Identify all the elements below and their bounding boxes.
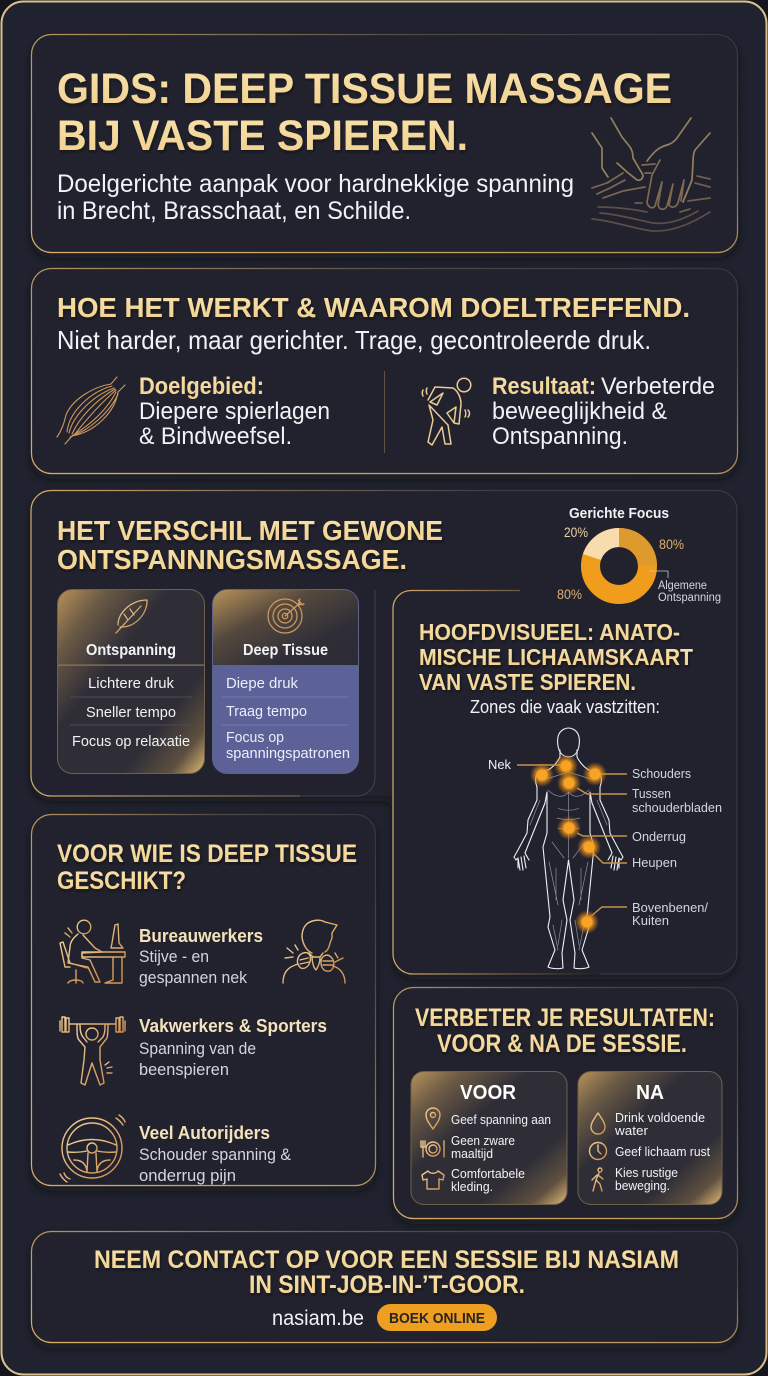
resultaat text: beweeglijkheid &	[492, 398, 667, 425]
button: boek online: BOEK ONLINE	[389, 1311, 485, 1327]
panel: contact	[32, 1232, 738, 1342]
zone labels: Schouders	[632, 766, 691, 781]
bureauwerkers text	[139, 926, 263, 987]
card: ontspanning	[58, 590, 204, 774]
autorijders text: Schouder spanning &	[139, 1145, 292, 1164]
icon: neck pain	[283, 920, 345, 983]
card: na: Drink voldoende	[615, 1111, 705, 1125]
chart: focus donut: 20%	[564, 525, 588, 540]
icon: clock	[590, 1142, 606, 1160]
heading: HOOFDVISUEEL: ANATO-	[419, 619, 680, 645]
icon: target	[268, 599, 304, 633]
heading	[57, 840, 357, 895]
icon: person with back pain	[422, 378, 471, 445]
call to action heading: IN SINT-JOB-IN-’T-GOOR.	[249, 1271, 525, 1299]
icon: walking person	[592, 1168, 603, 1191]
chart: focus donut	[557, 506, 721, 604]
callout lines	[517, 765, 627, 917]
heading: VOOR & NA DE SESSIE.	[437, 1030, 687, 1058]
heading: HET VERSCHIL MET GEWONE	[57, 515, 443, 546]
zone labels: Heupen	[632, 855, 677, 870]
panel: comparison	[57, 515, 443, 774]
card: voor: maaltijd	[451, 1147, 493, 1161]
subtitle	[57, 170, 574, 225]
doelgebied text	[139, 373, 330, 450]
call to action heading: NEEM CONTACT OP VOOR EEN SESSIE BIJ NASIAM	[94, 1246, 679, 1274]
icon: steering wheel	[60, 1115, 125, 1182]
zone labels	[488, 757, 722, 928]
doelgebied text: Diepere spierlagen	[139, 398, 330, 425]
heading	[415, 1004, 715, 1058]
heading: HOE HET WERKT & WAAROM DOELTREFFEND.	[57, 292, 690, 323]
card: voor: kleding.	[451, 1180, 493, 1194]
heading	[419, 619, 693, 695]
zone labels: Nek	[488, 757, 511, 772]
subtitle: in Brecht, Brasschaat, en Schilde.	[57, 197, 411, 225]
heading: VOOR WIE IS DEEP TISSUE	[57, 840, 357, 868]
resultaat text: Resultaat:	[492, 373, 596, 400]
title: BIJ VASTE SPIEREN.	[57, 112, 468, 160]
heading: ONTSPANNNGSMASSAGE.	[57, 544, 407, 575]
card: deep tissue: Traag tempo	[226, 703, 307, 720]
icon: location pin	[426, 1108, 440, 1129]
card: na: Geef lichaam rust	[615, 1145, 710, 1159]
vakwerkers text: beenspieren	[139, 1060, 229, 1079]
intro text: Niet harder, maar gerichter. Trage, gecontroleerde druk.	[57, 325, 651, 355]
heading	[57, 515, 443, 575]
doelgebied text: & Bindweefsel.	[139, 423, 292, 450]
autorijders text: onderrug pijn	[139, 1166, 236, 1185]
card: ontspanning: Sneller tempo	[86, 704, 176, 721]
card: ontspanning: Focus op relaxatie	[72, 733, 190, 750]
panel: title	[32, 34, 738, 252]
card: voor: Comfortabele	[451, 1167, 525, 1181]
heading: MISCHE LICHAAMSKAART	[419, 644, 693, 670]
heading: GESCHIKT?	[57, 867, 186, 895]
card: deep tissue: Deep Tissue	[243, 642, 328, 659]
icon: t-shirt	[422, 1171, 444, 1189]
card: voor: VOOR	[460, 1082, 517, 1104]
heading: VERBETER JE RESULTATEN:	[415, 1004, 715, 1032]
vakwerkers text: Vakwerkers & Sporters	[139, 1016, 327, 1036]
heading: VAN VASTE SPIEREN.	[419, 669, 636, 695]
bureauwerkers text: Stijve - en	[139, 947, 209, 966]
bureauwerkers text: Bureauwerkers	[139, 926, 263, 946]
autorijders text: Veel Autorijders	[139, 1123, 270, 1143]
card: ontspanning: Ontspanning	[86, 642, 176, 659]
panel: difference and body map background	[31, 490, 737, 974]
icon: water drop	[591, 1113, 605, 1134]
card: na: beweging.	[615, 1179, 670, 1193]
tension points	[530, 754, 607, 934]
autorijders text	[139, 1123, 292, 1185]
doelgebied text: Doelgebied:	[139, 373, 264, 400]
icon: massaging hands	[592, 118, 710, 231]
vakwerkers text	[139, 1016, 327, 1079]
chart: focus donut: Ontspanning	[658, 592, 721, 604]
card: na	[578, 1072, 722, 1204]
zone labels: Kuiten	[632, 913, 669, 928]
title	[57, 65, 672, 160]
icon: desk worker	[60, 920, 125, 983]
resultaat text: Ontspanning.	[492, 423, 628, 450]
website: nasiam.be	[272, 1307, 364, 1330]
bureauwerkers text: gespannen nek	[139, 968, 247, 987]
card: na: Kies rustige	[615, 1166, 678, 1180]
card: voor: Geef spanning aan	[451, 1113, 551, 1127]
button: boek online	[377, 1304, 497, 1331]
subtitle: Doelgerichte aanpak voor hardnekkige spanning	[57, 170, 574, 198]
resultaat text	[492, 373, 715, 450]
panel: body map	[393, 590, 722, 974]
card: deep tissue: spanningspatronen	[226, 745, 350, 762]
icon: feather	[116, 600, 147, 633]
card: deep tissue	[212, 590, 358, 774]
body figure	[514, 728, 623, 969]
card: ontspanning: Lichtere druk	[88, 675, 174, 692]
card: voor	[411, 1072, 567, 1204]
card: deep tissue: Diepe druk	[226, 675, 298, 692]
panel: voor wie	[32, 814, 376, 1186]
card: na: water	[614, 1124, 648, 1138]
resultaat text: Verbeterde	[601, 373, 715, 400]
chart: focus donut: Gerichte Focus	[569, 506, 669, 522]
panel: voor en na	[394, 988, 738, 1218]
zone labels: schouderbladen	[632, 800, 722, 815]
panel: how it works	[32, 268, 738, 474]
vakwerkers text: Spanning van de	[139, 1039, 256, 1058]
subheading: Zones die vaak vastzitten:	[470, 697, 660, 717]
zone labels: Onderrug	[632, 829, 686, 844]
card: na: NA	[636, 1082, 664, 1104]
title: GIDS: DEEP TISSUE MASSAGE	[57, 65, 672, 113]
chart: focus donut: 80%	[557, 587, 582, 602]
call to action heading	[94, 1246, 679, 1299]
icon: muscle	[57, 377, 125, 444]
card: deep tissue: Focus op	[226, 729, 284, 746]
zone labels: Tussen	[632, 786, 671, 801]
zone labels: Bovenbenen/	[632, 900, 708, 915]
card: voor: Geen zware	[451, 1134, 515, 1148]
icon: weightlifter	[60, 1017, 125, 1085]
chart: focus donut: 80%	[659, 537, 684, 552]
chart: focus donut: Algemene	[658, 580, 707, 592]
icon: plate and cutlery	[421, 1141, 444, 1157]
